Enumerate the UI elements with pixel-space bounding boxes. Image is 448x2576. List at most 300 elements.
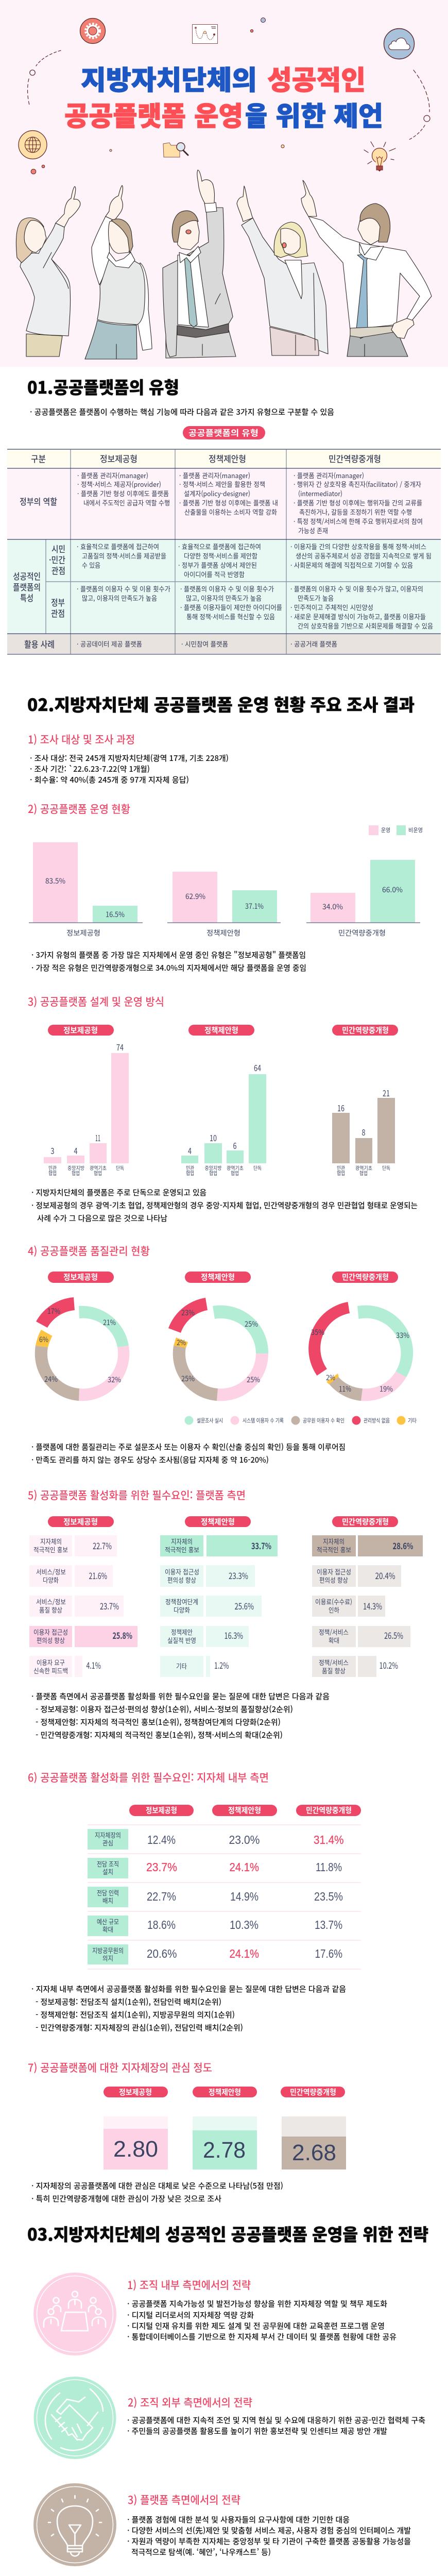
strategy 3: platform: 적극적으로 탐색(예. ‘혜안’, ‘나우캐스트’ 등) <box>131 2547 271 2557</box>
bars: policy type factors: 25.6% <box>235 1599 254 1612</box>
icon: folder and magnifier <box>163 143 188 157</box>
table header row <box>31 452 381 465</box>
bar chart: operation vs non-operation <box>29 842 420 938</box>
bar chart: policy type: 10 <box>210 1131 217 1144</box>
table: values: 18.6% <box>147 1918 176 1931</box>
bar chart: policy type: 4 <box>188 1144 192 1157</box>
bars: private capacity type factors: 지자체의 <box>323 1536 344 1546</box>
bar chart: information type: 4 <box>74 1144 78 1157</box>
table row: government role: · 플랫폼 기반 형성 이후에도 플랫폼 <box>77 488 169 498</box>
block: 3) design and operation <box>28 994 418 1224</box>
table row: government role: · 특정 정책/서비스에 한해 주요 행위자로서의 참여 <box>294 516 423 526</box>
bars: private capacity type factors: 민간역량중개형 <box>342 1516 389 1527</box>
bars: policy type factors: 정책제안 <box>171 1627 193 1637</box>
strategy 2: external: · 주민들의 공공플랫폼 활용도를 높이기 위한 홍보전략 및 인센티브 제공 방안 개발 <box>127 2426 387 2436</box>
table row: successful platform traits: 아이디어를 적극 반영함 <box>184 569 245 579</box>
table row: successful platform traits: · 플랫폼의 이용자 수 및 이용 횟수가 <box>180 584 274 594</box>
strategy 3: platform <box>33 2483 411 2566</box>
text: design notes <box>31 1187 418 1224</box>
bars: information type factors: 지자체의 <box>40 1536 62 1546</box>
legend: quality management <box>184 1416 417 1425</box>
table: values: 23.7% <box>146 1860 177 1874</box>
table row: use cases: 활용 사례 <box>24 637 55 650</box>
strategy 1: internal <box>33 2273 397 2355</box>
title: 운영 <box>194 95 243 133</box>
table row: government role <box>20 470 423 535</box>
bars: information type factors: 25.8% <box>112 1629 132 1641</box>
bars: private capacity type factors: 편의성 향상 <box>319 1575 348 1585</box>
table row: government role: 내에서 주도적인 공급자 역할 수행 <box>83 498 170 507</box>
icon: gear <box>80 19 105 43</box>
bar chart: information type <box>44 1025 129 1177</box>
bar chart: information type: 중앙지방 <box>67 1164 84 1172</box>
bars: private capacity type factors: 28.6% <box>392 1539 413 1552</box>
table: values <box>146 1833 344 1960</box>
bars: private capacity type factors: 10.2% <box>379 1658 398 1671</box>
donut chart: private capacity type: 2% <box>326 1372 335 1383</box>
bar chart: operation vs non-operation: 정보제공형 <box>66 928 100 938</box>
table row: government role: 설계자(policy-designer) <box>184 488 250 498</box>
bar chart: policy type: 단독 <box>253 1164 262 1172</box>
strategy 3: platform: · 다양한 서비스의 선(先)제안 및 맞춤형 서비스 제공, 사용자 경험 중심의 인터페이스 개발 <box>127 2525 411 2536</box>
bar chart: policy type: 6 <box>233 1139 237 1151</box>
title: 위한 <box>275 95 326 133</box>
donut chart: private capacity type: 19% <box>380 1384 393 1394</box>
table header row: 정보제공형 <box>100 452 137 465</box>
strategy 1: internal: · 공공플랫폼 지속가능성 및 발전가능성 향상을 위한 지자체장 역할 및 책무 제도화 <box>127 2298 387 2309</box>
table: row labels: 배치 <box>102 1895 113 1905</box>
bar chart: private capacity type: 21 <box>383 1087 390 1099</box>
bar chart: information type: 협업 <box>72 1169 80 1177</box>
block: 1) survey scope: · 조사 기간: `22.6.23-7.22(약 1개월) <box>30 764 150 774</box>
strategy 1: internal: · 통합데이터베이스를 기반으로 한 지자체 부서 간 데이터 및 플랫폼 현황에 대한 공유 <box>127 2331 397 2342</box>
bar chart: policy type: 협업 <box>186 1169 194 1177</box>
bars: information type factors: 적극적인 홍보 <box>33 1545 68 1554</box>
bars: policy type factors: 16.3% <box>225 1629 243 1641</box>
table row: successful platform traits: 많고, 이용자의 만족도가 높음 <box>186 593 262 603</box>
bars: policy type factors: 다양화 <box>174 1605 190 1615</box>
table row: successful platform traits: 만족도가 높음 <box>298 593 334 603</box>
bar chart: information type: 3 <box>50 1144 55 1157</box>
bars: information type factors: 서비스/정보 <box>36 1567 66 1577</box>
bars: private capacity type factors: 품질 향상 <box>322 1666 346 1675</box>
table: values: 14.9% <box>230 1890 259 1903</box>
table row: successful platform traits: 시민 <box>51 542 65 555</box>
block: 1) survey scope: · 조사 대상: 전국 245개 지방자치단체(광역 17개, 기초 228개) <box>30 753 229 764</box>
bars: information type factors: 다양화 <box>43 1575 59 1585</box>
strategy 3: platform: · 플랫폼 경험에 대한 분석 및 사용자들의 요구사항에 대한 기민한 대응 <box>127 2514 350 2525</box>
text: platform factor notes: - 정보제공형: 이용자 접근성·편의성 향상(1순위), 서비스·정보의 품질향상(2순위) <box>36 1704 293 1715</box>
illustration: person 4 <box>237 186 328 355</box>
table: values: 24.1% <box>230 1947 259 1960</box>
text: interest notes: · 특히 민간역량중개형에 대한 관심이 가장 낮은 것으로 조사 <box>31 2193 221 2204</box>
donut chart: information type: 24% <box>44 1374 58 1384</box>
table header pills: 정보제공형 <box>146 1805 177 1816</box>
panel: hero banner <box>0 0 448 367</box>
text: design notes: · 정보제공형의 경우 광역-기초 협업, 정책제안형의 경우 중앙-지자체 협업, 민간역량중개형의 경우 민관협업 형태로 운영되는 <box>31 1200 418 1211</box>
table row: use cases: · 공공데이터 제공 플랫폼 <box>77 639 142 649</box>
bar chart: private capacity type <box>332 1025 398 1177</box>
table: values: 17.6% <box>315 1947 342 1960</box>
donut chart: policy type: 25% <box>181 1374 195 1384</box>
table row: successful platform traits: · 플랫폼 이용자들이 제안한 아이디어를 <box>180 602 282 612</box>
table row: successful platform traits: 플랫폼의 <box>13 580 41 593</box>
title <box>64 59 383 133</box>
block: 7) head of government interest: 7) 공공플랫폼에 대한 지자체장의 관심 정도 <box>28 2060 212 2075</box>
heading: section 03: 03.지방자치단체의 성공적인 공공플랫폼 운영을 위한 전략 <box>27 2221 428 2246</box>
table row: successful platform traits: 다양한 정책·서비스를 제안함 <box>184 551 257 561</box>
bar chart: operation vs non-operation: 34.0% <box>322 902 343 912</box>
bar chart: information type: 광역기초 <box>90 1164 107 1172</box>
donut chart: private capacity type: 35% <box>311 1327 324 1337</box>
strategy 1: internal: · 디지털 인재 유치를 위한 제도 설계 및 전 공무원에 대한 교육훈련 프로그램 운영 <box>127 2320 385 2331</box>
bar chart: information type: 민관 <box>48 1164 57 1172</box>
table row: successful platform traits: 수 있음 <box>82 560 100 570</box>
table: row labels: 전담 조직 <box>97 1859 119 1869</box>
text: interest notes: · 지자체장의 공공플랫폼에 대한 관심은 대체로 낮은 수준으로 나타남(5점 만점) <box>31 2180 283 2191</box>
bars: private capacity type factors: 확대 <box>329 1635 339 1645</box>
strategy 3: platform: · 자원과 역량이 부족한 지자체는 중앙정부 및 타 기관이 구축한 플랫폼 공동활용 가능성을 <box>127 2536 411 2547</box>
bars: policy type factors: 1.2% <box>214 1658 229 1671</box>
gauge: private capacity type: 2.68 <box>292 2140 336 2165</box>
panel: section 02 survey results <box>27 691 423 2204</box>
bar chart: operation vs non-operation: 66.0% <box>382 885 403 895</box>
table row: successful platform traits: · 민주적이고 주체적인 시민양성 <box>290 602 373 612</box>
table: values: 11.8% <box>316 1860 342 1874</box>
block: 1) survey scope: · 회수율: 약 40%(총 245개 중 97개 지자체 응답) <box>30 774 189 785</box>
text: internal factor notes: · 지자체 내부 측면에서 공공플랫폼 활성화를 위한 필수요인을 묻는 질문에 대한 답변은 다음과 같음 <box>31 1984 346 1994</box>
text: platform factor notes: - 민간역량중개형: 지자체의 적극적인 홍보(1순위), 정책·서비스의 확대(2순위) <box>36 1730 283 1740</box>
bars: information type factors: 22.7% <box>93 1539 112 1552</box>
donut chart: private capacity type: 33% <box>396 1330 409 1341</box>
table row: successful platform traits <box>13 541 433 631</box>
text: quality notes: · 만족도 관리를 하지 않는 경우도 상당수 조사됨(응답 지자체 중 약 16-20%) <box>31 1454 269 1465</box>
bars: policy type factors: 지자체의 <box>171 1536 193 1546</box>
table row: government role: · 플랫폼 관리자(manager) <box>179 470 250 480</box>
bar chart: policy type: 광역기초 <box>227 1164 244 1172</box>
donut chart: information type <box>35 1272 129 1401</box>
donut chart: policy type: 2% <box>177 1337 186 1348</box>
legend <box>369 825 423 835</box>
bars: policy type factors: 23.3% <box>229 1569 248 1582</box>
donut chart: policy type: 25% <box>245 1319 258 1329</box>
bar chart: private capacity type: 민간역량중개형 <box>342 1025 389 1036</box>
bar chart: information type: 정보제공형 <box>63 1025 98 1036</box>
legend: quality management: 시스템 이용자 수 기록 <box>243 1416 284 1425</box>
bar chart: private capacity type: 16 <box>337 1101 344 1114</box>
bar chart: operation vs non-operation: 정책제안형 <box>206 928 240 938</box>
bars: private capacity type factors: 인하 <box>329 1605 339 1615</box>
bars: private capacity type factors: 20.4% <box>375 1569 395 1582</box>
bars: policy type factors: 이용자 접근성 <box>165 1567 199 1577</box>
block: 3) design and operation: 3) 공공플랫폼 설계 및 운영 방식 <box>28 994 164 1009</box>
badge: platform types: 공공플랫폼의 유형 <box>188 426 259 438</box>
table row: successful platform traits: 관점 <box>51 606 65 619</box>
text: operation notes: · 가장 적은 유형은 민간역량중개형으로 34.0%의 지자체에서만 해당 플랫폼을 운영 중임 <box>31 962 306 973</box>
bars: private capacity type factors: 정책/서비스 <box>319 1627 349 1637</box>
icon: handshake <box>34 2377 116 2459</box>
table row: government role: · 플랫폼 관리자(manager) <box>294 470 364 480</box>
text: platform factor notes <box>31 1691 330 1740</box>
donut chart: information type: 21% <box>103 1317 116 1328</box>
table row: government role: · 플랫폼 관리자(manager) <box>77 470 148 480</box>
table row: successful platform traits: · 효율적으로 플랫폼에 접근하여 <box>178 541 261 551</box>
table row: successful platform traits: · 사회문제의 해결에 직접적으로 기여할 수 있음 <box>290 560 413 570</box>
bars: information type factors: 정보제공형 <box>63 1516 98 1527</box>
illustration: person 2 <box>85 185 152 359</box>
strategy 2: external <box>34 2377 425 2459</box>
bars: private capacity type factors: 26.5% <box>384 1629 403 1641</box>
table row: successful platform traits: 통해 정책·서비스를 혁신할 수 있음 <box>186 612 275 621</box>
strategy 1: internal: 1) 조직 내부 측면에서의 전략 <box>127 2277 251 2293</box>
bar chart: operation vs non-operation: 민간역량중개형 <box>338 928 386 938</box>
text: quality notes <box>31 1442 346 1465</box>
table row: successful platform traits: 간의 상호작용을 기반으로 사회문제를 해결할 수 있음 <box>298 621 433 631</box>
illustration: person 5 <box>301 180 432 357</box>
table: row labels: 확대 <box>102 1924 113 1934</box>
bar chart: information type: 협업 <box>94 1169 102 1177</box>
table row: use cases: · 시민참여 플랫폼 <box>181 639 228 649</box>
donut chart: policy type: 25% <box>247 1375 260 1385</box>
bars: information type factors: 21.6% <box>89 1569 107 1582</box>
table header row: 정책제안형 <box>209 452 246 465</box>
table row: successful platform traits: 관점 <box>51 564 65 577</box>
gauge: policy type: 정책제안형 <box>209 2087 241 2097</box>
bar chart: private capacity type: 민관 <box>337 1164 345 1172</box>
illustration: person 1 <box>16 187 80 357</box>
table header row: 구분 <box>31 452 46 465</box>
bars: private capacity type factors: 이용자 접근성 <box>317 1567 351 1577</box>
text: platform factor notes: · 플랫폼 측면에서 공공플랫폼 활성화를 위한 필수요인을 묻는 질문에 대한 답변은 다음과 같음 <box>31 1691 330 1702</box>
icon: light bulb <box>364 142 395 172</box>
gauge: information type: 2.80 <box>113 2137 158 2162</box>
bar chart: private capacity type: 광역기초 <box>355 1164 372 1172</box>
bars: information type factors: 이용자 요구 <box>37 1657 65 1667</box>
bars: information type factors: 23.7% <box>100 1599 119 1612</box>
bar chart: policy type: 64 <box>254 1061 261 1074</box>
table: row labels: 예산 규모 <box>97 1917 119 1926</box>
donut chart: private capacity type: 민간역량중개형 <box>342 1272 389 1282</box>
table: values: 24.1% <box>230 1860 259 1874</box>
table: values: 23.0% <box>229 1833 260 1846</box>
bars: private capacity type factors: 적극적인 홍보 <box>317 1545 351 1554</box>
icon: chart card <box>193 25 217 43</box>
gauge: information type: 정보제공형 <box>119 2087 152 2097</box>
bars: policy type factors: 실질적 반영 <box>167 1635 196 1645</box>
table row: successful platform traits: 많고, 이용자의 만족도가 높음 <box>82 593 157 603</box>
bar chart: policy type: 정책제안형 <box>204 1025 238 1036</box>
table: platform types <box>7 449 441 654</box>
panel: section 03 strategies <box>27 2221 428 2566</box>
table header pills: 정책제안형 <box>228 1805 261 1816</box>
bar chart: private capacity type: 협업 <box>359 1169 368 1177</box>
table: values: 20.6% <box>147 1947 177 1960</box>
title: 지방자치단체의 <box>81 59 257 97</box>
bars: information type factors: 이용자 접근성 <box>33 1627 68 1637</box>
legend: quality management: 공무원 이용자 수 확인 <box>303 1416 344 1425</box>
text: internal factor notes: - 민간역량중개형: 지자체장의 관심(1순위), 전담인력 배치(2순위) <box>36 2022 243 2033</box>
block: 7) head of government interest <box>28 2060 346 2204</box>
block: 1) survey scope: 1) 조사 대상 및 조사 과정 <box>28 732 135 747</box>
block: 4) quality management: 4) 공공플랫폼 품질관리 현황 <box>28 1243 150 1259</box>
block: 2) operation status: 2) 공공플랫폼 운영 현황 <box>28 801 130 817</box>
strategy 1: internal: · 디지털 리더로서의 지자체장 역량 강화 <box>127 2310 254 2320</box>
bar chart: operation vs non-operation: 62.9% <box>185 891 205 902</box>
title: 을 <box>245 95 267 133</box>
donut chart: policy type: 23% <box>181 1308 195 1318</box>
table: values: 13.7% <box>315 1918 342 1931</box>
table row: government role: 정부의 역할 <box>20 495 57 507</box>
icon: meeting people <box>33 2273 116 2355</box>
bars: policy type factors: 편의성 향상 <box>167 1575 196 1585</box>
block: 5) platform factors <box>28 1487 423 1740</box>
bar chart: information type: 74 <box>116 1041 124 1053</box>
donut chart: private capacity type <box>308 1272 413 1401</box>
table row: government role: (intermediator) <box>298 488 342 498</box>
table row: successful platform traits: 특성 <box>20 591 33 604</box>
table row: successful platform traits: · 플랫폼의 이용자 수 및 이용 횟수가 <box>77 584 170 594</box>
text: internal factor notes: - 정책제안형: 전담조직 설치(1순위), 지방공무원의 의지(1순위) <box>36 2009 235 2020</box>
block: 5) platform factors: 5) 공공플랫폼 활성화를 위한 필수요인: 플랫폼 측면 <box>28 1487 246 1503</box>
heading: section 02: 02.지방자치단체 공공플랫폼 운영 현황 주요 조사 결과 <box>27 691 415 716</box>
gauge: policy type <box>193 2087 257 2170</box>
bars: policy type factors: 33.7% <box>251 1539 271 1552</box>
donut chart: private capacity type: 11% <box>339 1384 351 1394</box>
table: row labels: 설치 <box>102 1867 113 1876</box>
heading: section 01: 01.공공플랫폼의 유형 <box>27 374 179 399</box>
title: 제언 <box>334 95 383 133</box>
table row: successful platform traits: · 새로운 문제해결 방식이 가능하고, 플랫폼 이용자들 <box>290 612 426 621</box>
bar chart: information type: 11 <box>95 1131 100 1144</box>
icon: globe <box>19 131 47 159</box>
block: 2) operation status <box>28 801 423 973</box>
gauge: private capacity type <box>281 2087 346 2170</box>
table: row labels: 지자체장의 <box>95 1830 121 1840</box>
donut chart: information type: 정보제공형 <box>63 1272 98 1282</box>
text: platform factor notes: - 정책제안형: 지자체의 적극적인 홍보(1순위), 정책참여단계의 다양화(2순위) <box>36 1717 281 1727</box>
table row: government role: · 정책·서비스 제공자(provider) <box>77 479 161 489</box>
bars: policy type factors: 적극적인 홍보 <box>165 1545 199 1554</box>
bars: private capacity type factors: 정책/서비스 <box>319 1657 349 1667</box>
bar chart: operation vs non-operation: 37.1% <box>245 901 264 911</box>
donut chart: information type: 17% <box>47 1306 60 1316</box>
table row: successful platform traits: ·민간 <box>49 553 65 566</box>
strategy 2: external: 2) 조직 외부 측면에서의 전략 <box>128 2395 252 2410</box>
table row: successful platform traits: 생산의 공동주체로서 성공 경험을 지속적으로 쌓게 됨 <box>296 551 432 561</box>
table row: government role: · 플랫폼 기반 형성 이후에는 플랫폼 내 <box>179 498 278 507</box>
donut chart: policy type <box>168 1272 268 1401</box>
bars: private capacity type factors: 이용료(수수료) <box>315 1597 352 1606</box>
donut chart: policy type: 정책제안형 <box>201 1272 235 1282</box>
table row: government role: 가능성 존재 <box>298 526 328 535</box>
decorative dashed orbit <box>28 50 430 140</box>
table: row labels: 관심 <box>102 1838 113 1848</box>
donut chart: information type: 6% <box>39 1334 48 1345</box>
table row: government role: · 플랫폼 기반 형성 이후에는 행위자들 간의 교류를 <box>294 498 422 507</box>
icon: cloud <box>384 29 414 59</box>
table row: successful platform traits: · 이용자들 간의 다양한 상호작용을 통해 정책·서비스 <box>290 541 426 551</box>
gauge: private capacity type: 민간역량중개형 <box>290 2087 336 2097</box>
legend: quality management: 관리방식 없음 <box>364 1416 390 1425</box>
bar chart: operation vs non-operation: 16.5% <box>106 909 125 920</box>
table row: successful platform traits: 고품질의 정책·서비스를 제공받을 <box>82 551 166 561</box>
bar chart: private capacity type: 단독 <box>382 1164 390 1172</box>
table: values: 12.4% <box>147 1833 176 1846</box>
text: operation notes: · 3가지 유형의 플랫폼 중 가장 많은 지자체에서 운영 중인 유형은 "정보제공형" 플랫폼임 <box>31 950 306 960</box>
strategy 3: platform: 3) 플랫폼 측면에서의 전략 <box>128 2492 240 2507</box>
table: row labels: 의지 <box>102 1953 113 1963</box>
table header row: 민간역량중개형 <box>329 452 381 465</box>
table row: government role: 촉진하거나, 갈등을 조정하기 위한 역할 수행 <box>299 507 412 517</box>
table: row labels <box>88 1829 128 1964</box>
bar chart: policy type: 중앙지방 <box>205 1164 221 1172</box>
legend: quality management: 기타 <box>408 1416 417 1425</box>
table: values: 22.7% <box>147 1890 176 1903</box>
bars: policy type factors: 정책제안형 <box>201 1516 235 1527</box>
bar chart: policy type: 협업 <box>209 1169 217 1177</box>
bars: policy type factors <box>160 1516 278 1677</box>
legend: 비운영 <box>408 826 423 834</box>
legend: 운영 <box>381 826 390 834</box>
bars: information type factors: 품질 향상 <box>39 1605 62 1615</box>
gauge: information type <box>104 2087 168 2170</box>
table row: successful platform traits: · 효율적으로 플랫폼에 접근하여 <box>77 541 159 551</box>
table row: successful platform traits: · 플랫폼의 이용자 수 및 이용 횟수가 많고, 이용자의 <box>290 584 423 594</box>
table: row labels: 지방공무원의 <box>92 1945 124 1955</box>
text: interest notes <box>31 2180 283 2204</box>
bars: private capacity type factors <box>312 1516 423 1677</box>
strategy 2: external: · 공공플랫폼에 대한 지속적 조언 및 지역 현실 및 수요에 대응하기 위한 공공-민간 협력체 구축 <box>127 2415 425 2426</box>
bar chart: operation vs non-operation: 83.5% <box>45 876 65 886</box>
bar chart: policy type: 협업 <box>231 1169 239 1177</box>
bars: policy type factors: 기타 <box>176 1661 187 1671</box>
table: values: 10.3% <box>230 1918 259 1931</box>
donut chart: information type: 32% <box>108 1375 121 1385</box>
table header pills <box>129 1805 361 1816</box>
table row: successful platform traits: 정부 <box>51 596 65 608</box>
panel: section 01 platform types <box>7 374 441 654</box>
table row: government role: · 정책·서비스 제안을 활용한 정책 <box>179 479 265 489</box>
table: row labels: 전담 인력 <box>97 1888 119 1897</box>
table: values: 31.4% <box>314 1833 344 1846</box>
gauge: policy type: 2.78 <box>203 2138 246 2163</box>
bar chart: information type: 단독 <box>116 1164 124 1172</box>
bar chart: information type: 협업 <box>48 1169 57 1177</box>
bar chart: policy type <box>181 1025 266 1177</box>
bars: information type factors: 신속한 피드백 <box>33 1666 68 1675</box>
bars: information type factors: 편의성 향상 <box>37 1635 65 1645</box>
table header pills: 민간역량중개형 <box>306 1805 352 1816</box>
text: internal factor notes <box>31 1984 346 2033</box>
icon: light bulb <box>33 2483 116 2566</box>
text: quality notes: · 플랫폼에 대한 품질관리는 주로 설문조사 또는 이용자 수 확인(산출 중심의 확인) 등을 통해 이루어짐 <box>31 1442 346 1452</box>
bar chart: private capacity type: 8 <box>361 1126 366 1138</box>
block: 1) survey scope <box>28 732 229 785</box>
table row: government role: 산출물을 이용하는 소비자 역할 강화 <box>184 507 277 517</box>
illustration: person 3 <box>163 170 236 358</box>
block: 6) internal factors <box>28 1770 361 2033</box>
block: 4) quality management <box>28 1243 417 1465</box>
text: design notes: 사례 수가 그 다음으로 많은 것으로 나타남 <box>37 1213 167 1224</box>
bars: information type factors: 4.1% <box>87 1658 101 1671</box>
text: section 01 intro: · 공공플랫폼은 플랫폼이 수행하는 핵심 기능에 따라 다음과 같은 3가지 유형으로 구분할 수 있음 <box>30 406 334 417</box>
table row: successful platform traits: 성공적인 <box>13 569 41 582</box>
table row: use cases <box>24 637 337 650</box>
block: 6) internal factors: 6) 공공플랫폼 활성화를 위한 필수요인: 지자체 내부 측면 <box>28 1770 269 1785</box>
bars: private capacity type factors: 14.3% <box>363 1599 382 1612</box>
bars: policy type factors: 정책참여단계 <box>165 1597 198 1606</box>
legend: quality management: 설문조사 실시 <box>197 1416 223 1425</box>
